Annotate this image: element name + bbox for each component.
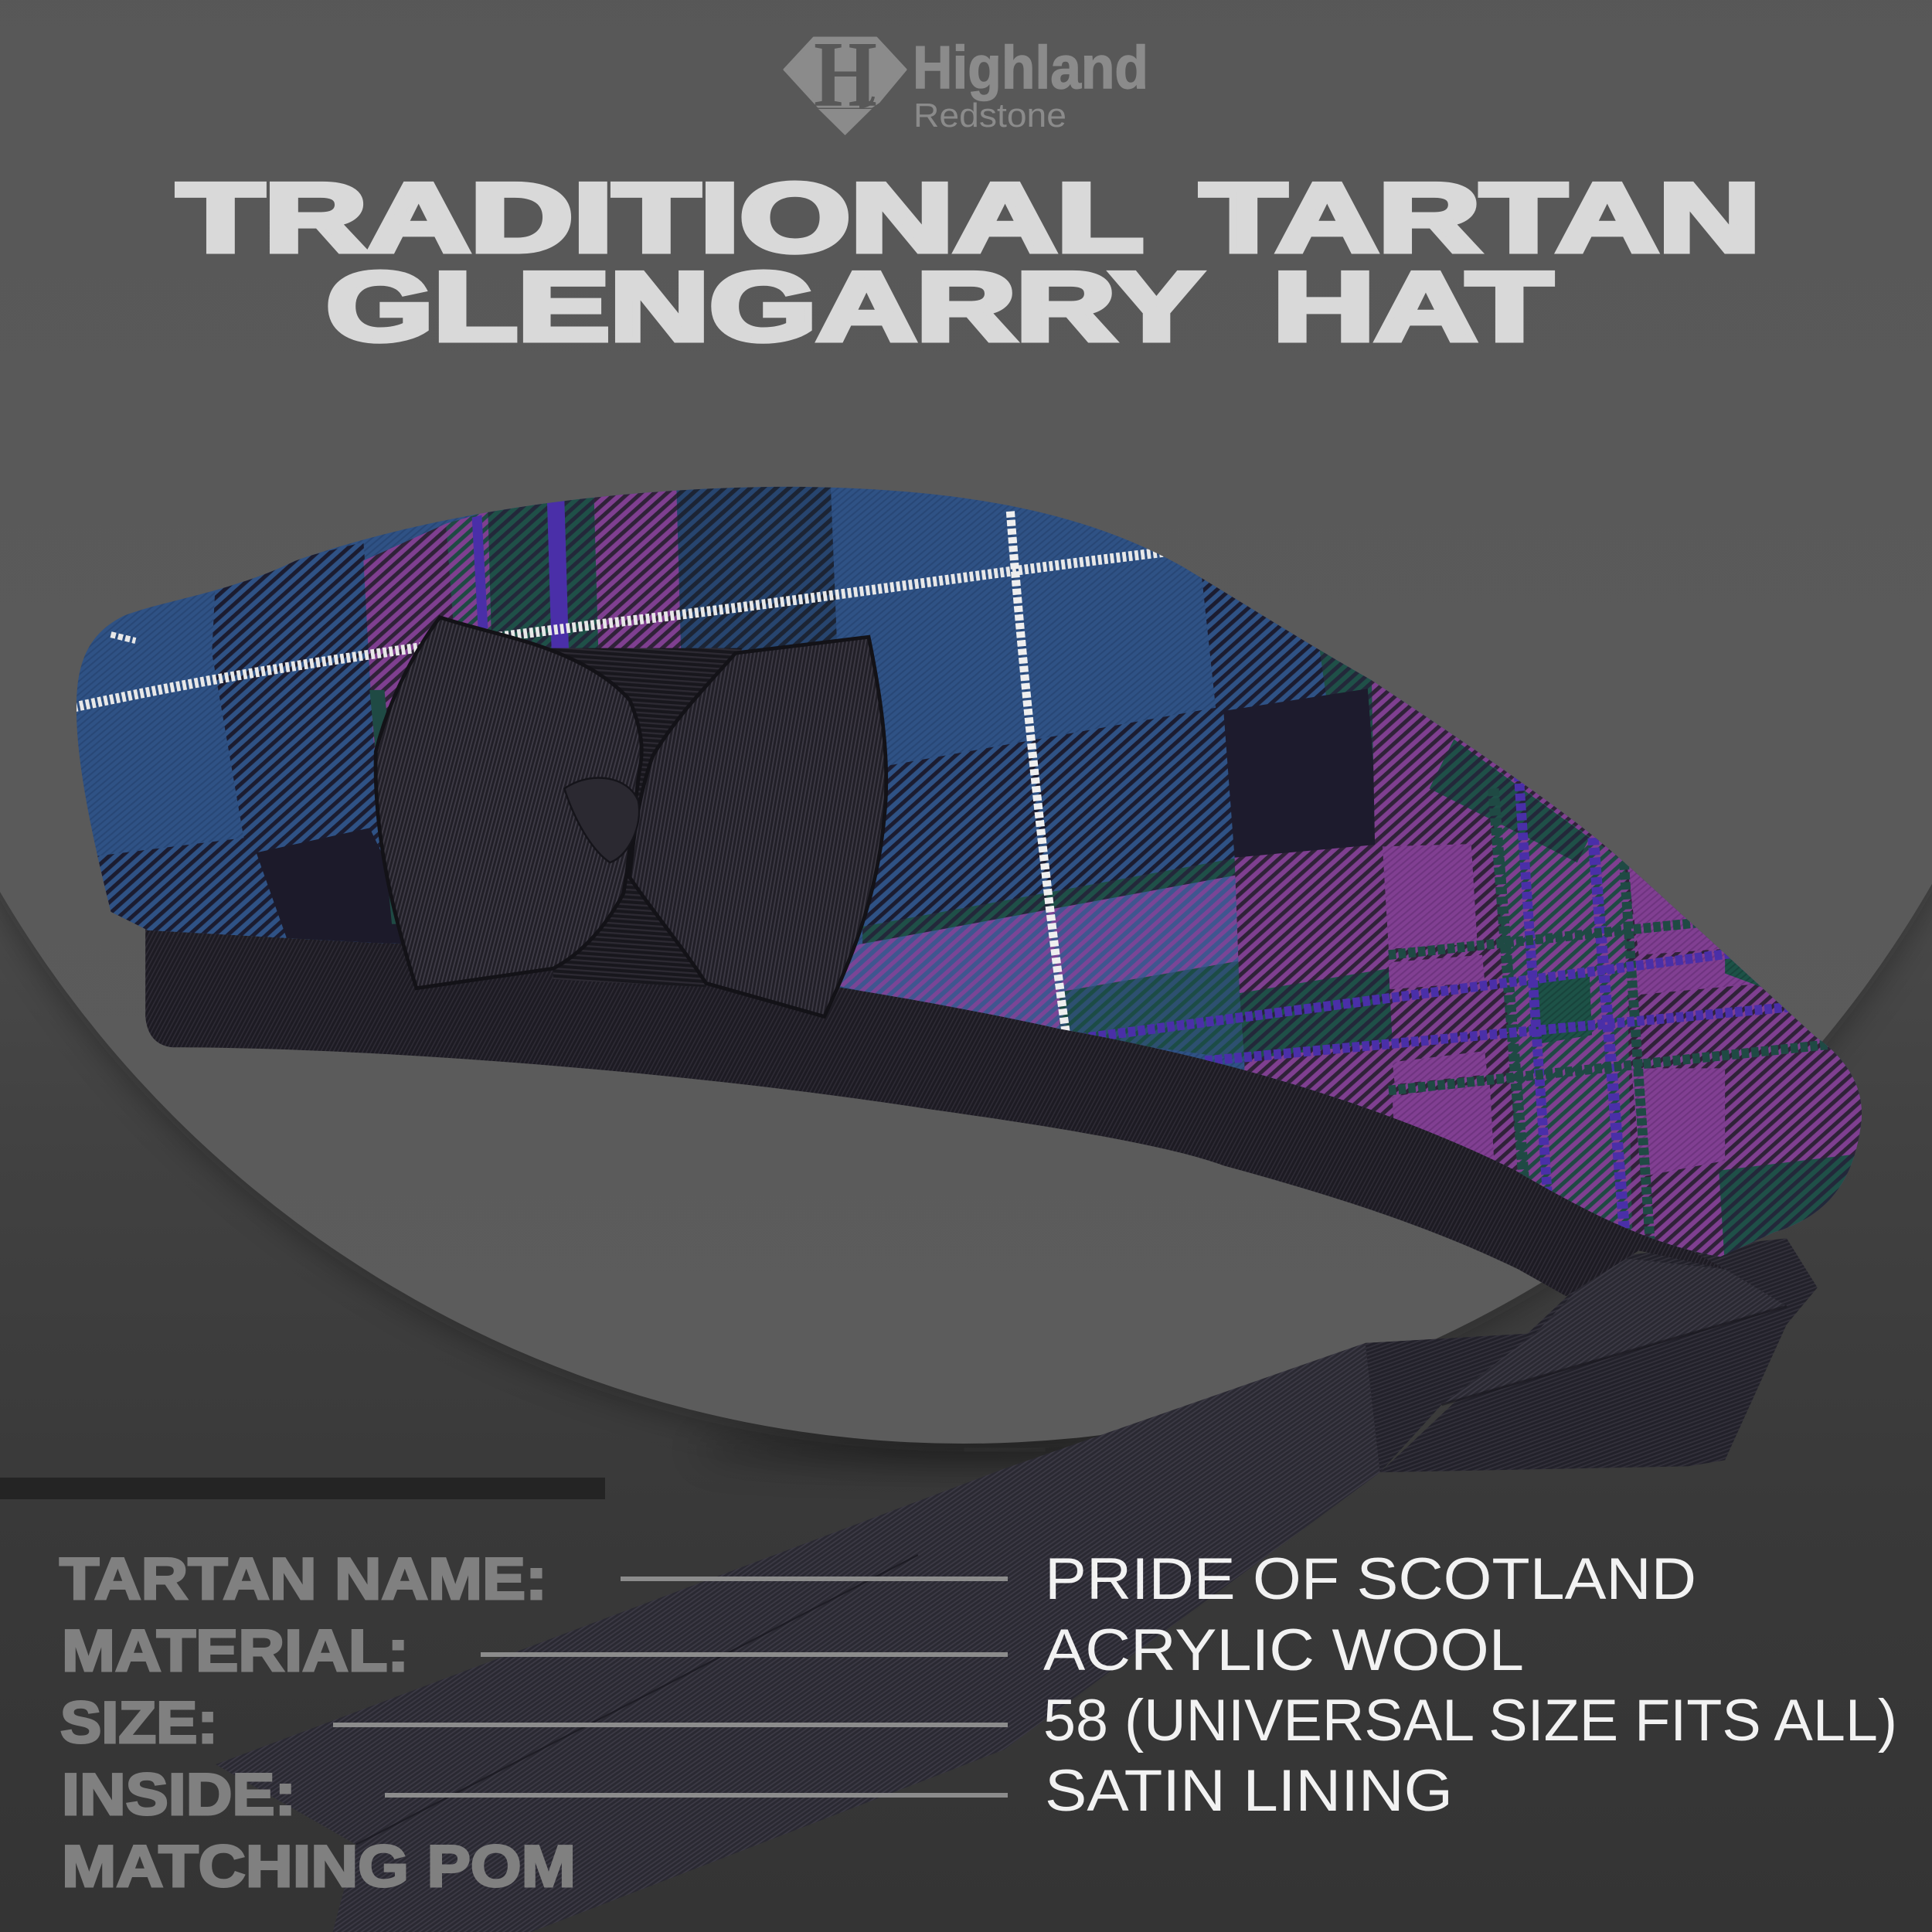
ribbon tails <box>216 1238 1818 1932</box>
white plaid lines <box>68 512 1165 1032</box>
value: inside: SATIN LINING <box>1045 1758 1453 1824</box>
spec labels <box>60 1546 576 1900</box>
value: size: 58 (UNIVERSAL SIZE FITS ALL) <box>1043 1688 1897 1753</box>
label: matching pom: MATCHING POM <box>62 1834 576 1900</box>
hat band <box>145 924 1725 1296</box>
title line 2 <box>326 252 1553 361</box>
title <box>177 163 1760 361</box>
title line 1: TARTAN <box>1200 163 1760 272</box>
logo wordmark: Redstone: Redstone <box>913 97 1066 134</box>
bow knot <box>564 778 639 862</box>
icon: diamond monogram <box>784 22 906 135</box>
value: material: ACRYLIC WOOL <box>1043 1617 1524 1683</box>
spec values <box>1043 1546 1897 1824</box>
icon: diamond monogram: H <box>814 22 877 127</box>
label: size: SIZE: <box>60 1690 218 1756</box>
value: tartan name: PRIDE OF SCOTLAND <box>1045 1546 1696 1612</box>
title line 2: GLENGARRY <box>326 252 1202 361</box>
label: inside: INSIDE: <box>62 1762 296 1828</box>
logo wordmark: Highland: Highland <box>913 33 1148 101</box>
label: tartan name: TARTAN NAME: <box>60 1546 547 1612</box>
title line 1: TRADITIONAL <box>177 163 1144 272</box>
bow right wing <box>630 637 886 1016</box>
hat illustration <box>0 468 1932 1932</box>
bow centre band <box>547 648 742 987</box>
bow left wing <box>376 617 641 988</box>
title line 1 <box>177 163 1760 272</box>
plaid thread lines <box>1083 777 1832 1240</box>
dark accent bar <box>0 1478 605 1499</box>
label: material: MATERIAL: <box>62 1618 409 1684</box>
bow <box>376 617 886 1016</box>
title line 2: HAT <box>1273 252 1553 361</box>
tartan crown <box>77 487 1862 1257</box>
specifications list <box>60 1546 1897 1900</box>
logo <box>784 22 1148 135</box>
